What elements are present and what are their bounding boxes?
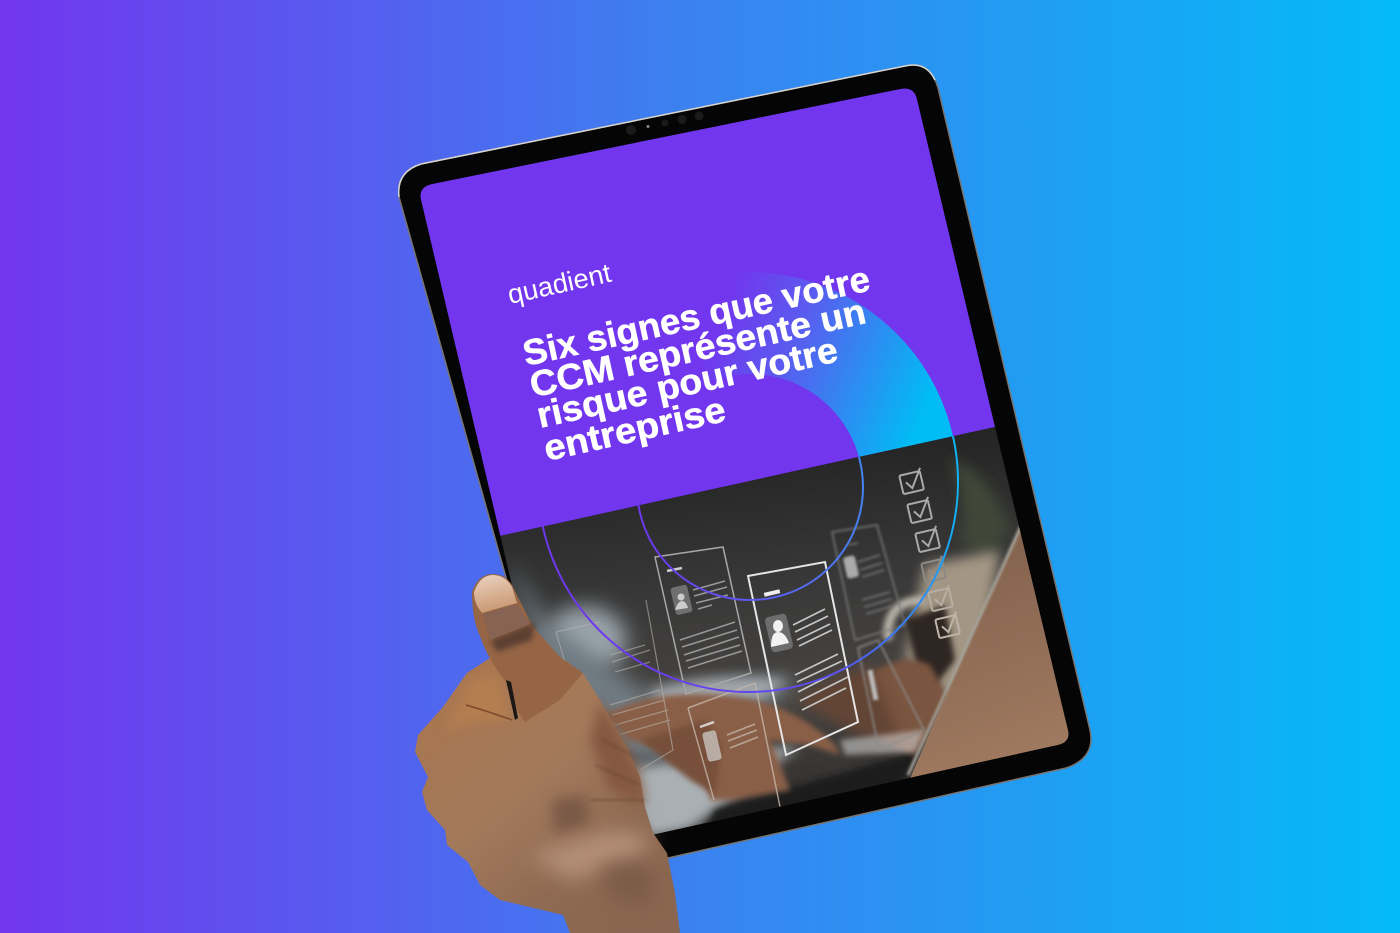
front cameras <box>626 112 704 135</box>
screen: cover page <box>420 88 1068 834</box>
thumb base wrinkles <box>590 740 645 800</box>
wrist shadow <box>600 860 655 905</box>
title: CCM représente un <box>526 290 869 405</box>
floating document: left <box>655 547 751 694</box>
thumb <box>472 574 583 722</box>
logo: quadient: quadient <box>505 258 614 310</box>
purple cover panel <box>420 88 995 536</box>
title: Six signes que votre <box>519 258 873 374</box>
thumb joint <box>483 604 530 640</box>
floating document: far left <box>556 600 673 770</box>
blurred typing hands <box>605 660 950 800</box>
fingers and back of hand <box>415 627 680 933</box>
gradient arc band <box>544 272 953 526</box>
floating document: lower left <box>688 683 780 807</box>
floating document: right <box>832 525 924 750</box>
floating document: centre <box>748 562 858 755</box>
back-of-hand shadow <box>552 795 590 835</box>
thumb nail <box>474 575 517 613</box>
tablet body <box>399 65 1091 876</box>
checklist <box>899 468 961 638</box>
thin inner ring <box>638 456 864 601</box>
blurred background shapes <box>510 460 1010 840</box>
wrist highlight <box>530 830 650 880</box>
document portrait icon <box>764 613 794 653</box>
finger crease <box>466 705 512 720</box>
laptop lid <box>910 528 1068 778</box>
title: entreprise <box>540 388 729 469</box>
thin outer ring <box>542 436 959 693</box>
title <box>519 258 873 469</box>
thumb knuckle shadow <box>490 622 535 652</box>
hand holding tablet <box>415 574 680 933</box>
plant <box>950 461 1009 552</box>
side-of-hand shadow <box>590 700 645 807</box>
tablet edge sliver between thumb and fingers <box>506 680 518 720</box>
mug <box>905 550 1000 700</box>
finger highlight <box>445 672 512 730</box>
title: risque pour votre <box>533 329 841 436</box>
photo of hands and floating documents <box>500 427 1068 834</box>
